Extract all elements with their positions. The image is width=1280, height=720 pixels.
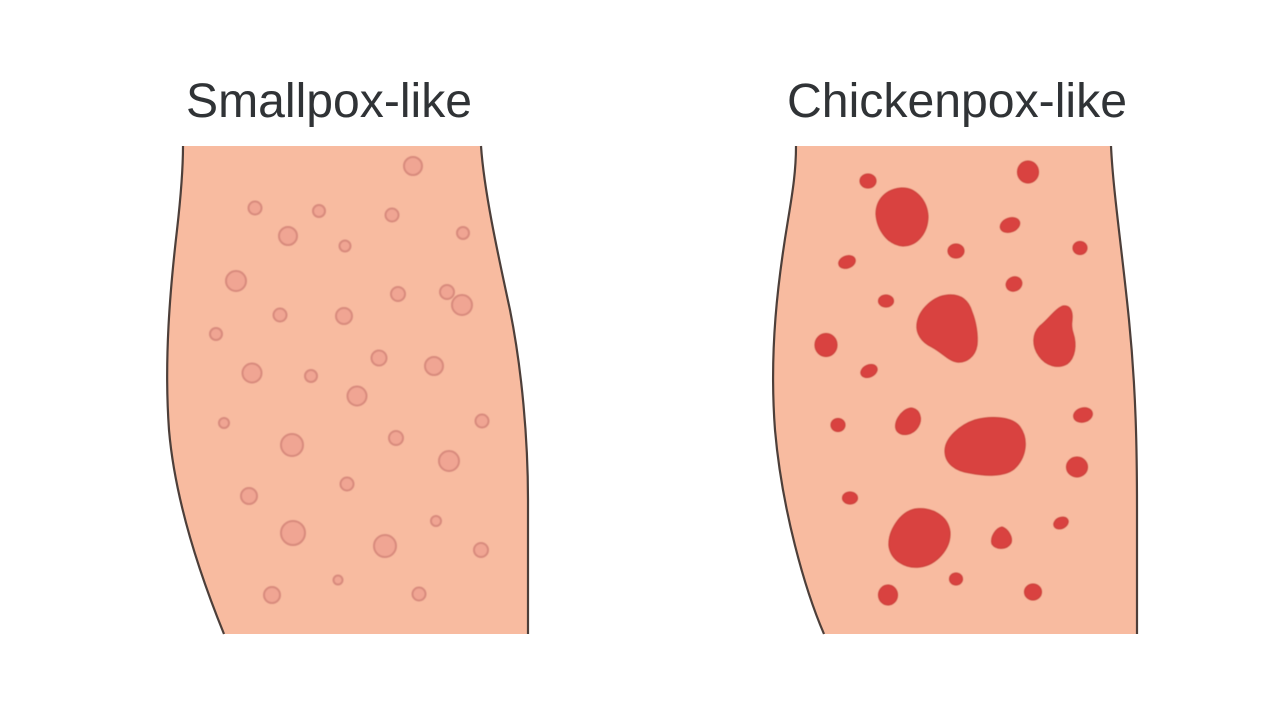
arm skin shape bbox=[167, 146, 528, 634]
large blob 1 bbox=[876, 188, 928, 246]
small lesions bbox=[815, 161, 1094, 605]
irregular red lesions bbox=[815, 161, 1094, 605]
panel: smallpox-like arm bbox=[167, 146, 528, 634]
title: Smallpox-like: Smallpox-like bbox=[186, 75, 472, 128]
large blob 5 bbox=[889, 509, 950, 567]
panel: chickenpox-like arm bbox=[773, 146, 1137, 634]
arm skin shape bbox=[773, 146, 1137, 634]
arm right outline bbox=[481, 146, 528, 634]
large blob 2 bbox=[917, 295, 977, 362]
large blob 3 bbox=[1034, 306, 1075, 366]
arm left outline bbox=[773, 146, 824, 634]
title: Chickenpox-like: Chickenpox-like bbox=[787, 75, 1127, 128]
arm left outline bbox=[167, 146, 224, 634]
arm right outline bbox=[1111, 146, 1137, 634]
large blob 4 bbox=[945, 418, 1025, 475]
uniform small round lesions bbox=[210, 157, 488, 603]
